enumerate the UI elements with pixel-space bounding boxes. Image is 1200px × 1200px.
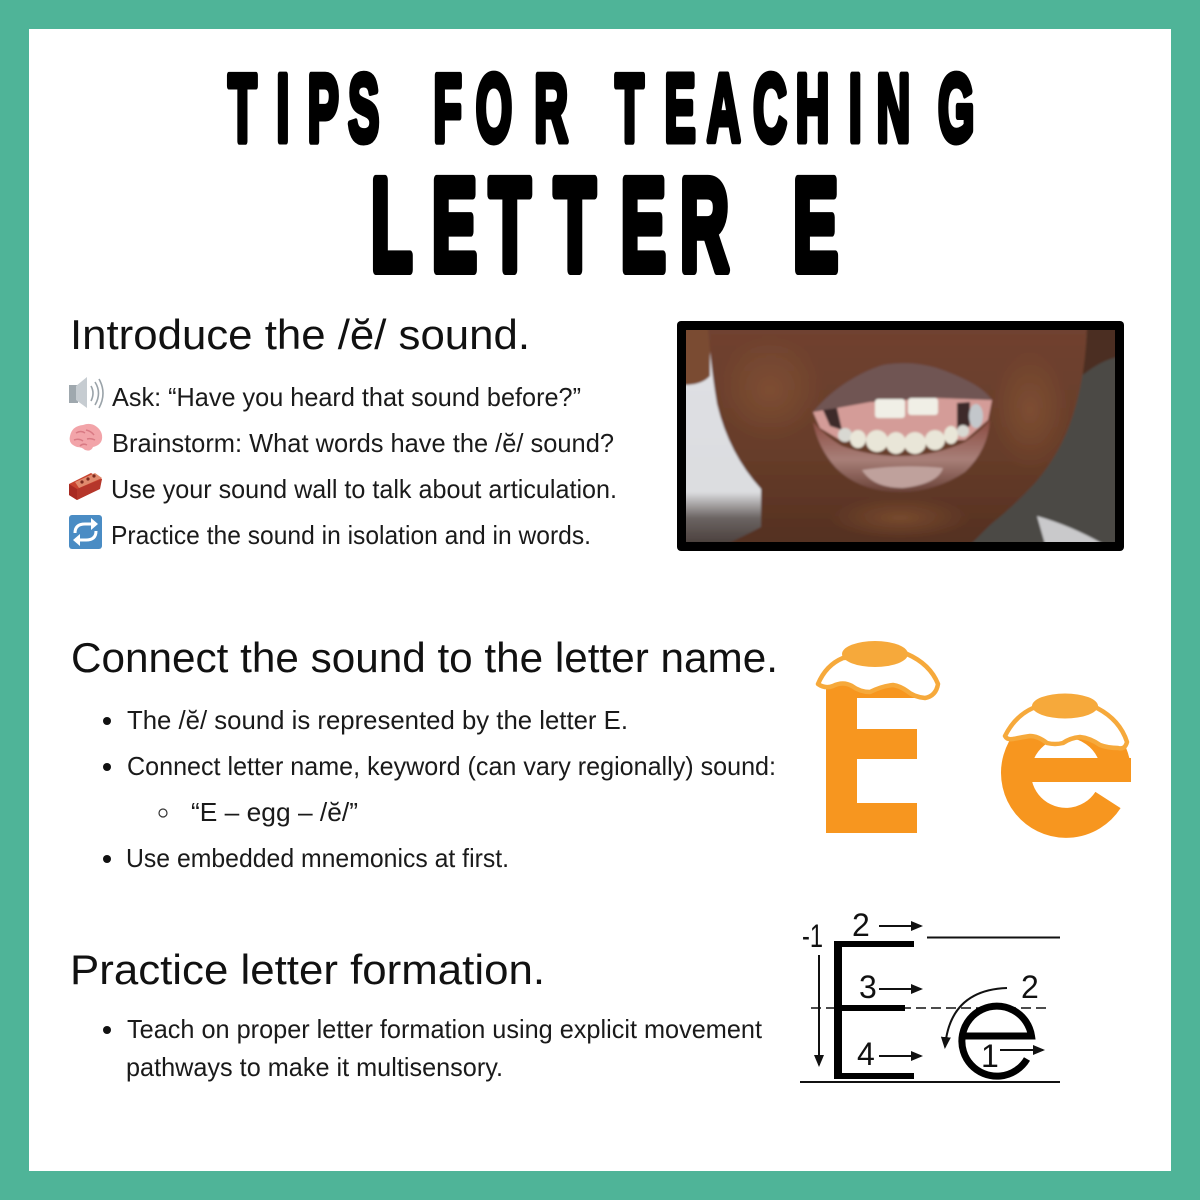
diagram: letter formation strokes: 4 [857, 1036, 875, 1072]
text: brainstorm: Brainstorm: What words have the /ĕ/ sound? [112, 428, 614, 458]
icon: brick [69, 473, 102, 500]
mnemonic: lowercase e with cap [1005, 694, 1131, 823]
diagram: letter formation strokes: 3 [859, 969, 877, 1005]
icon: repeat [69, 515, 102, 549]
bullet list: connect: The /ĕ/ sound is represented by the letter E. [127, 705, 628, 735]
icon: brain [70, 424, 102, 451]
diagram: letter formation strokes: -1 [802, 918, 823, 954]
bullet list: formation [103, 1014, 763, 1082]
title [228, 56, 974, 299]
diagram: letter formation strokes [800, 907, 1060, 1082]
bullet list: connect: Connect letter name, keyword (can vary regionally) sound: [127, 751, 776, 781]
bullet list: formation: pathways to make it multisensory. [126, 1052, 503, 1082]
mnemonic: uppercase E with cap [818, 641, 938, 833]
photo: open mouth [677, 321, 1124, 551]
bullet list: connect: Use embedded mnemonics at first. [126, 843, 509, 873]
heading: connect: Connect the sound to the letter name. [71, 634, 778, 681]
bullet list: formation: Teach on proper letter formation using explicit movement [127, 1014, 763, 1044]
heading: formation: Practice letter formation. [70, 946, 545, 993]
lower lip [813, 420, 990, 492]
diagram: letter formation strokes: 2 [1021, 969, 1039, 1005]
title: TIPS FOR TEACHING [228, 56, 974, 163]
icon: speaker [69, 377, 103, 408]
text: practice: Practice the sound in isolation and in words. [111, 520, 591, 550]
text: ask: Ask: “Have you heard that sound before?” [112, 382, 581, 412]
heading: introduce: Introduce the /ĕ/ sound. [70, 311, 530, 358]
diagram: letter formation strokes: 1 [981, 1038, 999, 1074]
section: connect the sound [71, 634, 778, 873]
section: introduce the sound [69, 311, 617, 550]
mouth interior [813, 398, 992, 440]
bullet list: connect: “E – egg – /ĕ/” [191, 797, 358, 827]
teeth [875, 398, 983, 428]
bullet list: connect [103, 705, 776, 873]
upper lip [813, 363, 992, 412]
title: LETTER E [371, 153, 838, 299]
text: sound wall: Use your sound wall to talk about articulation. [111, 474, 617, 504]
section: letter formation [70, 946, 763, 1082]
diagram: letter formation strokes: 2 [852, 907, 870, 943]
